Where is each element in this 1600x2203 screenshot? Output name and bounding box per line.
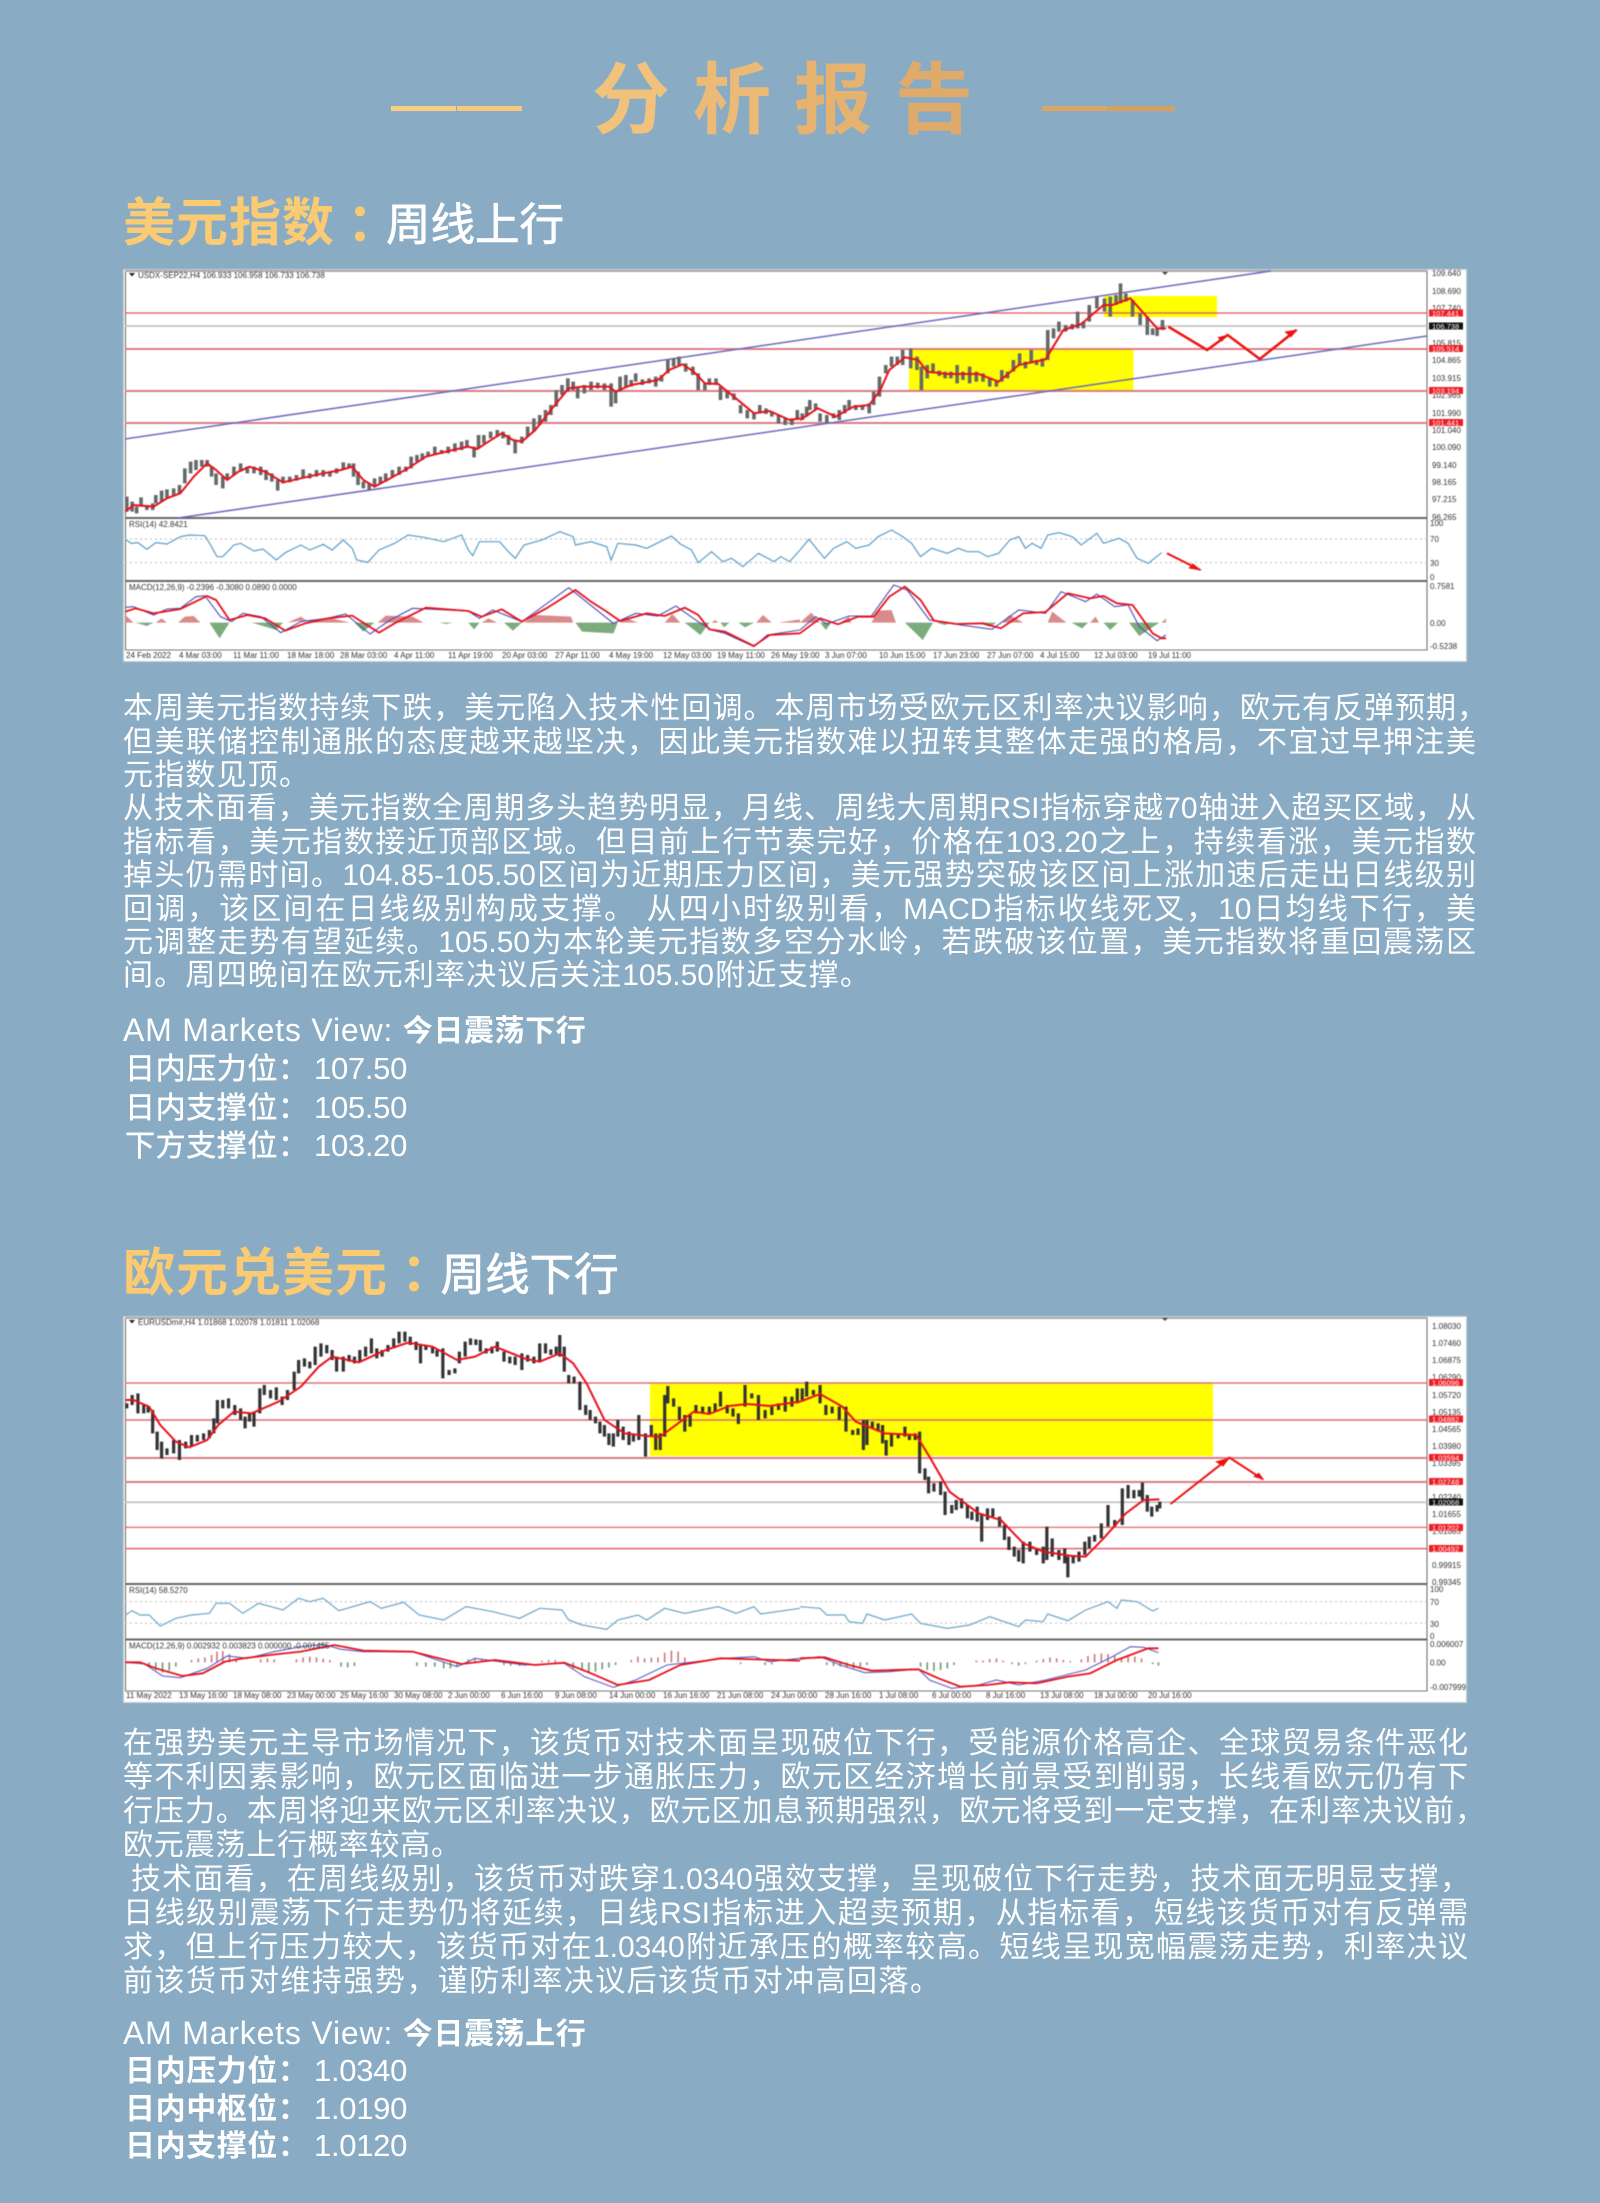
price axis: 0: [1430, 1632, 1435, 1641]
text block: EUR/USD analysis: 欧元震荡上行概率较高。: [123, 1828, 461, 1862]
yellow resistance zone: [650, 1383, 1213, 1456]
panel: US dollar index section: [122, 194, 1487, 1163]
date axis: 27 Jun 07:00: [987, 651, 1034, 660]
price axis: 100: [1430, 519, 1444, 528]
date axis: 11 Apr 19:00: [448, 651, 493, 660]
price axis: 1.05135: [1432, 1408, 1461, 1417]
price axis: 101.441: [1432, 418, 1459, 428]
text block: USD index analysis: [123, 692, 1487, 992]
date axis: 9 Jun 08:00: [555, 1691, 597, 1700]
price axis: 1.05720: [1432, 1391, 1461, 1400]
price axis: 1.08030: [1432, 1322, 1461, 1331]
title text: 分: [592, 56, 670, 144]
price axis: 1.03594: [1432, 1454, 1459, 1462]
horizontal price levels: [125, 1383, 1427, 1549]
title text: [592, 56, 973, 144]
title: [391, 56, 1175, 144]
price axis: 100: [1430, 1585, 1444, 1594]
text block: USD index analysis: 本周美元指数持续下跌，美元陷入技术性回调。本周市场受欧元区利率决议影响，欧元有反弹预期，: [123, 692, 1487, 725]
price axis: 103.194: [1432, 386, 1459, 396]
heading: EUR/USD weekly down: 欧元兑美元: [123, 1245, 388, 1303]
date axis: [126, 1691, 1192, 1700]
price axis: 105.514: [1432, 344, 1459, 354]
price axis: 1.06875: [1432, 1356, 1461, 1365]
price axis: 1.01202: [1432, 1524, 1459, 1532]
text block: USD index analysis: 间。周四晚间在欧元利率决议后关注105.50附近支撑。: [123, 959, 870, 992]
view block: AM Markets View and key levels: 日内中枢位：: [125, 2093, 309, 2126]
date axis: 4 May 19:00: [609, 651, 654, 660]
text block: USD index analysis: 但美联储控制通胀的态度越来越坚决，因此美元指数难以扭转其整体走强的格局，不宜过早押注美: [123, 726, 1476, 759]
date axis: 18 May 08:00: [233, 1691, 282, 1700]
price axis: 105.815: [1432, 339, 1461, 348]
date axis: 4 Apr 11:00: [394, 651, 435, 660]
price axis: 30: [1430, 559, 1439, 568]
text block: USD index analysis: 元调整走势有望延续。105.50为本轮美元指数多空分水岭，若跌破该位置，美元指数将重回震荡区: [123, 926, 1476, 959]
text block: USD index analysis: 从技术面看，美元指数全周期多头趋势明显，月线、周线大周期RSI指标穿越70轴进入超买区域，从: [123, 792, 1476, 825]
date axis: 10 Jun 15:00: [879, 651, 926, 660]
RSI panel: [125, 520, 1427, 571]
price axis: -0.5238: [1430, 642, 1458, 651]
view block: AM Markets View and key levels: 103.20: [314, 1128, 407, 1163]
date axis: 18 Jul 00:00: [1094, 1691, 1138, 1700]
text block: EUR/USD analysis: 行压力。本周将迎来欧元区利率决议，欧元区加息预期强烈，欧元将受到一定支撑，在利率决议前，: [123, 1794, 1485, 1828]
chart frame: [123, 1316, 1467, 1703]
view block: AM Markets View and key levels: 105.50: [314, 1090, 407, 1125]
price axis: 99.140: [1432, 461, 1457, 470]
price axis: 1.00492: [1432, 1544, 1459, 1554]
date axis: 21 Jun 08:00: [717, 1691, 764, 1700]
chart header: USDX-SEP22,H4 106.933 106.958 106.733 106.738: [138, 271, 325, 280]
text block: EUR/USD analysis: 日线级别震荡下行走势仍将延续，日线RSI指标进入超卖预期，从指标看，短线该货币对有反弹需: [123, 1896, 1468, 1930]
chart header: [129, 271, 1168, 280]
channel trend lines: [125, 271, 1427, 518]
price axis: 1.04882: [1432, 1415, 1459, 1424]
price axis: 0.00: [1430, 1658, 1446, 1668]
date axis: 20 Apr 03:00: [502, 651, 548, 660]
price axis: 1.04565: [1432, 1425, 1461, 1434]
chart: USDX H4 candlestick with RSI and MACD: [122, 268, 1468, 662]
chart: EURUSD H4 candlestick with RSI and MACD: [122, 1316, 1468, 1704]
view block: AM Markets View and key levels: 日内压力位：: [125, 2055, 309, 2088]
date axis: 14 Jun 00:00: [609, 1691, 656, 1700]
date axis: 8 Jul 16:00: [986, 1691, 1026, 1700]
view block: AM Markets View and key levels: [123, 1012, 586, 1163]
date axis: 19 May 11:00: [717, 651, 765, 660]
heading: US dollar index weekly up: 周线上行: [386, 201, 564, 250]
chart header: EURUSDm#,H4 1.01868 1.02078 1.01811 1.02068: [138, 1318, 320, 1327]
price axis: 1.01085: [1432, 1527, 1461, 1536]
MACD panel: [125, 1642, 1158, 1688]
price axis: 1.03395: [1432, 1459, 1461, 1468]
price axis: 1.07460: [1432, 1339, 1461, 1348]
price axis: 102.965: [1432, 391, 1461, 400]
arrow: RSI down: [1167, 553, 1202, 571]
text block: EUR/USD analysis: [123, 1726, 1485, 1998]
view block: AM Markets View and key levels: AM Markets View: 今日震荡下行: [123, 1012, 586, 1048]
price axis: 1.03980: [1432, 1442, 1461, 1451]
date axis: 12 May 03:00: [663, 651, 712, 660]
text block: USD index analysis: 指标看，美元指数接近顶部区域。但目前上行节奏完好，价格在103.20之上，持续看涨，美元指数: [123, 826, 1476, 859]
date axis: 12 Jul 03:00: [1094, 651, 1138, 660]
date axis: 11 May 2022: [126, 1691, 172, 1700]
price axis: 101.040: [1432, 426, 1461, 435]
price axis: 1.06290: [1432, 1373, 1461, 1382]
text block: EUR/USD analysis: 技术面看，在周线级别，该货币对跌穿1.0340强效支撑，呈现破位下行走势，技术面无明显支撑，: [131, 1862, 1470, 1896]
price axis: 0: [1430, 573, 1435, 582]
date axis: 13 Jul 08:00: [1040, 1691, 1084, 1700]
text block: EUR/USD analysis: 在强势美元主导市场情况下，该货币对技术面呈现破位下行，受能源价格高企、全球贸易条件恶化: [123, 1726, 1468, 1760]
date axis: 4 Jul 15:00: [1040, 651, 1080, 660]
view block: AM Markets View and key levels: [123, 2014, 586, 2163]
view block: AM Markets View and key levels: 1.0190: [314, 2091, 407, 2126]
date axis: 1 Jul 08:00: [879, 1691, 919, 1700]
RSI panel: [125, 1586, 1427, 1629]
chart header: [129, 1318, 1168, 1327]
date axis: 25 May 16:00: [340, 1691, 389, 1700]
price axis: 70: [1430, 1598, 1439, 1607]
MACD panel: [125, 583, 1166, 647]
title text: 告: [895, 56, 973, 144]
date axis: 6 Jul 00:00: [932, 1691, 972, 1700]
view block: AM Markets View and key levels: 日内支撑位：: [125, 1092, 309, 1125]
date axis: 30 May 08:00: [394, 1691, 443, 1700]
view block: AM Markets View and key levels: 1.0120: [314, 2128, 407, 2163]
horizontal price levels: [125, 313, 1427, 423]
price axis: -0.007999: [1430, 1683, 1467, 1692]
date axis: 13 May 16:00: [179, 1691, 228, 1700]
date axis: 16 Jun 16:00: [663, 1691, 710, 1700]
text block: EUR/USD analysis: 求，但上行压力较大，该货币对在1.0340附近承压的概率较高。短线呈现宽幅震荡走势，利率决议: [123, 1930, 1468, 1964]
date axis: 18 Mar 18:00: [287, 651, 335, 660]
MACD panel: MACD(12,26,9) -0.2396 -0.3080 0.0890 0.0000: [129, 583, 297, 592]
price axis: 108.690: [1432, 287, 1461, 296]
view block: AM Markets View and key levels: 下方支撑位：: [125, 1130, 309, 1163]
price axis: 106.738: [1432, 322, 1459, 331]
view block: AM Markets View and key levels: 1.0340: [314, 2053, 407, 2088]
date axis: 24 Jun 00:00: [771, 1691, 818, 1700]
view block: AM Markets View and key levels: 107.50: [314, 1051, 407, 1086]
price axis: 0.00: [1430, 619, 1446, 628]
panel: EUR/USD section: [122, 1245, 1485, 2163]
price axis: 1.06096: [1432, 1378, 1459, 1388]
date axis: [126, 651, 1192, 660]
view block: AM Markets View and key levels: AM Markets View: 今日震荡上行: [123, 2014, 586, 2050]
text block: USD index analysis: 掉头仍需时间。104.85-105.50区间为近期压力区间，美元强势突破该区间上涨加速后走出日线级别: [123, 859, 1476, 892]
price axis: 30: [1430, 1620, 1439, 1629]
RSI panel: RSI(14) 58.5270: [129, 1586, 188, 1595]
price axis: 107.441: [1432, 309, 1459, 318]
price axis: 109.640: [1432, 269, 1461, 278]
text block: USD index analysis: 回调，该区间在日线级别构成支撑。 从四小时级别看，MACD指标收线死叉，10日均线下行，美: [123, 893, 1476, 926]
date axis: 4 Mar 03:00: [179, 651, 222, 660]
date axis: 3 Jun 07:00: [825, 651, 867, 660]
price axis: 1.01655: [1432, 1510, 1461, 1519]
arrow: projected zigzag path: [1168, 327, 1298, 359]
date axis: 24 Feb 2022: [126, 651, 171, 660]
price axis: 1.02240: [1432, 1493, 1461, 1502]
title text: 报: [794, 56, 872, 144]
heading: US dollar index weekly up: [123, 194, 564, 252]
price axis: 100.090: [1432, 443, 1461, 452]
moving average: [125, 298, 1166, 512]
price axis: 0.99915: [1432, 1561, 1461, 1570]
price axis: 97.215: [1432, 495, 1457, 504]
price candles: [127, 283, 1162, 513]
title rule left: [391, 106, 522, 111]
chart frame: [123, 269, 1467, 662]
date axis: 11 Mar 11:00: [233, 651, 280, 660]
text block: EUR/USD analysis: 等不利因素影响，欧元区面临进一步通胀压力，欧元区经济增长前景受到削弱，长线看欧元仍有下: [123, 1760, 1468, 1794]
yellow resistance zones: [909, 296, 1217, 391]
price axis: 104.865: [1432, 356, 1461, 365]
price axis: 98.165: [1432, 478, 1457, 487]
text block: EUR/USD analysis: 前该货币对维持强势，谨防利率决议后该货币对冲高回落。: [123, 1964, 940, 1998]
price axis: 0.7581: [1430, 582, 1455, 591]
heading: EUR/USD weekly down: 周线下行: [441, 1251, 619, 1300]
date axis: 6 Jun 16:00: [501, 1691, 543, 1700]
price axis: 96.265: [1432, 513, 1457, 522]
date axis: 28 Jun 16:00: [825, 1691, 872, 1700]
date axis: 27 Apr 11:00: [555, 651, 600, 660]
title rule right: [1042, 106, 1175, 111]
date axis: 17 Jun 23:00: [933, 651, 980, 660]
title text: 析: [693, 56, 771, 144]
date axis: 23 May 00:00: [287, 1691, 336, 1700]
date axis: 19 Jul 11:00: [1148, 651, 1192, 660]
heading: US dollar index weekly up: 美元指数: [123, 194, 335, 252]
moving average: [125, 1343, 1159, 1557]
price axis: 0.99345: [1432, 1578, 1461, 1587]
price axis: [1429, 1322, 1467, 1692]
text block: USD index analysis: 元指数见顶。: [123, 759, 309, 792]
price axis: 103.915: [1432, 374, 1461, 383]
date axis: 20 Jul 16:00: [1148, 1691, 1192, 1700]
heading: US dollar index weekly up: ：: [347, 194, 399, 252]
view block: AM Markets View and key levels: 日内支撑位：: [125, 2130, 309, 2163]
heading: EUR/USD weekly down: ：: [401, 1245, 453, 1303]
price axis: 1.02068: [1432, 1498, 1459, 1507]
price axis: 0.006007: [1430, 1640, 1464, 1649]
date axis: 28 Mar 03:00: [340, 651, 388, 660]
price axis: 101.990: [1432, 409, 1461, 418]
view block: AM Markets View and key levels: 日内压力位：: [125, 1053, 309, 1086]
date axis: 2 Jun 00:00: [448, 1691, 490, 1700]
date axis: 26 May 19:00: [771, 651, 820, 660]
price axis: 70: [1430, 535, 1439, 544]
price axis: 107.740: [1432, 304, 1461, 313]
price candles: [127, 1332, 1160, 1577]
price axis: [1429, 269, 1463, 651]
MACD panel: MACD(12,26,9) 0.002932 0.003823 0.000000 -0.001455: [129, 1642, 330, 1650]
RSI panel: RSI(14) 42.8421: [129, 520, 188, 529]
price axis: 1.02748: [1432, 1478, 1459, 1486]
arrow: projected up then down: [1171, 1458, 1264, 1504]
heading: EUR/USD weekly down: [123, 1245, 619, 1303]
